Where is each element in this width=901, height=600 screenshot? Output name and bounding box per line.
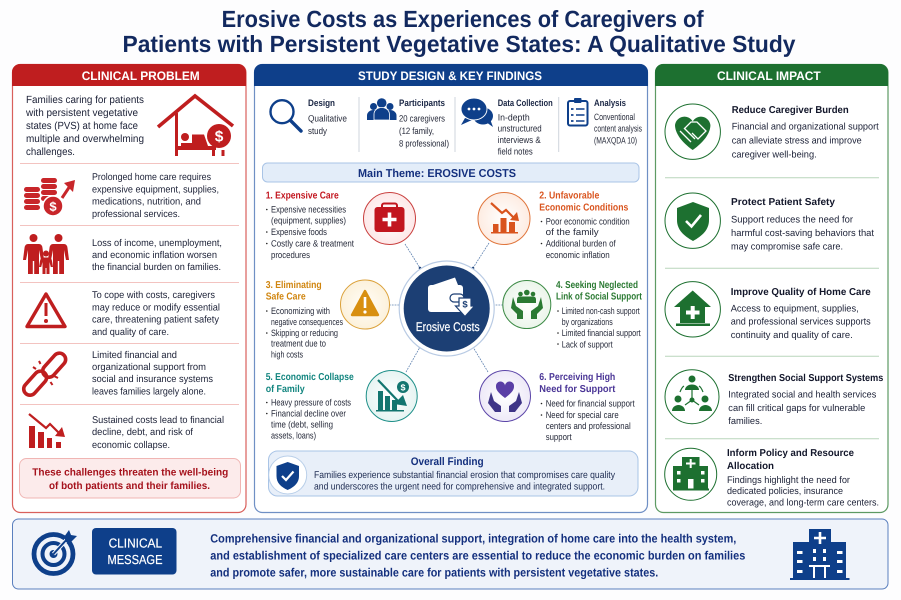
- theme 1: expensive care: Expensive foods: [271, 227, 327, 237]
- text: clinical message: and promote safer, more sustainable care for patients with persistent vegetative states.: [210, 566, 658, 580]
- text: strengthen social support systems: can fill critical gaps for vulnerable: [728, 403, 865, 414]
- text: protect patient safety: may compromise safe care.: [731, 242, 843, 252]
- text: limited support: [92, 350, 213, 398]
- theme 4: seeking neglected link of social support: Limited non-cash support: [562, 306, 640, 316]
- text: equipment costs: expensive equipment, supplies,: [92, 184, 219, 196]
- icon: clipboard checklist: [568, 98, 588, 126]
- icon: chart with dollar: $: [400, 382, 406, 392]
- theme 6: perceiving high need for support: Need for financial support: [546, 398, 635, 408]
- icon: hospital: [665, 448, 717, 500]
- text: protect patient safety: [731, 197, 874, 252]
- theme 4: seeking neglected link of social support: Lack of support: [562, 340, 613, 350]
- theme 3: eliminating safe care: treatment due to: [271, 338, 326, 348]
- icon: social network: [665, 370, 719, 424]
- text: income loss: the financial burden on families.: [92, 262, 221, 273]
- text: data collection: [498, 97, 553, 156]
- theme 1: expensive care: Costly care & treatment: [271, 238, 354, 248]
- text: safety threat: may reduce or modify essential: [92, 302, 220, 314]
- title: Patients with Persistent Vegetative States: A Qualitative Study: [122, 31, 796, 57]
- text: analysis: [594, 97, 642, 146]
- heading: study design: [254, 64, 648, 86]
- icon: warning triangle: [27, 294, 65, 326]
- text: financial decline: Sustained costs lead to financial: [92, 415, 224, 426]
- theme 3: eliminating safe care: [266, 280, 343, 360]
- center: erosive costs: Erosive Costs: [416, 320, 480, 334]
- theme 6: perceiving high need for support: Need for special care: [546, 410, 619, 420]
- text: intro: with persistent vegetative: [25, 108, 138, 119]
- text: financial decline: decline, debt, and risk of: [92, 427, 193, 438]
- theme 5: economic collapse of family: assets, loans): [271, 430, 316, 440]
- theme 3: eliminating safe care: Safe Care: [266, 292, 306, 302]
- theme 5: economic collapse of family: Heavy pressure of costs: [271, 398, 351, 408]
- callout: overall finding: and underscores the urgent need for comprehensive and integrated support.: [314, 482, 605, 492]
- text: reduce caregiver burden: caregiver well-being.: [732, 150, 817, 160]
- icon: participants: [367, 98, 397, 120]
- text: participants: Participants: [399, 97, 445, 108]
- text: analysis: (MAXQDA 10): [594, 136, 637, 146]
- text: design: Qualitative: [308, 114, 347, 124]
- text: participants: 8 professional): [399, 138, 449, 148]
- text: analysis: Analysis: [594, 97, 626, 108]
- text: clinical message: [210, 532, 746, 580]
- text: strengthen social support systems: [728, 373, 884, 427]
- heading: clinical problem: CLINICAL PROBLEM: [82, 69, 200, 83]
- icon: house with bed and dollar: $: [215, 128, 224, 146]
- text: financial decline: [92, 415, 224, 451]
- connectors: [389, 243, 503, 372]
- theme 4: seeking neglected link of social support: 4. Seeking Neglected: [556, 280, 638, 291]
- icon: house with bed and dollar: [158, 96, 233, 156]
- panel: clinical message: [12, 519, 888, 589]
- text: equipment costs: professional services.: [92, 209, 180, 220]
- title: Erosive Costs as Experiences of Caregivers of: [222, 6, 704, 32]
- text: strengthen social support systems: Strengthen Social Support Systems: [728, 373, 884, 384]
- theme 1: expensive care: 1. Expensive Care: [266, 190, 339, 202]
- title: [122, 6, 796, 57]
- theme 1: expensive care: procedures: [271, 250, 310, 260]
- theme 2: unfavorable economic conditions: 2. Unfavorable: [539, 190, 600, 202]
- theme 6: perceiving high need for support: [539, 372, 635, 442]
- icon: first aid kit: [364, 192, 416, 244]
- text: reduce caregiver burden: [732, 105, 879, 160]
- theme 6: perceiving high need for support: centers and professional: [546, 421, 631, 431]
- callout: challenges: [20, 458, 240, 498]
- theme 2: unfavorable economic conditions: Poor economic condition: [546, 216, 630, 226]
- theme 4: seeking neglected link of social support: Limited financial support: [562, 328, 641, 338]
- text: protect patient safety: Support reduces the need for: [731, 214, 854, 226]
- text: limited support: Limited financial and: [92, 350, 177, 361]
- icon: magnifier: [270, 100, 301, 131]
- text: intro: states (PVS) at home face: [26, 121, 138, 132]
- heading: clinical impact: [655, 64, 888, 86]
- theme 2: unfavorable economic conditions: of the family: [546, 227, 599, 237]
- text: participants: (12 family,: [399, 126, 434, 136]
- panel: study design and key findings: [254, 64, 648, 512]
- text: protect patient safety: Protect Patient Safety: [731, 197, 835, 208]
- theme 4: seeking neglected link of social support: Link of Social Support: [556, 292, 643, 302]
- theme 2: unfavorable economic conditions: economic inflation: [546, 250, 610, 260]
- text: clinical message: Comprehensive financial and organizational support, integration of home care into the health system,: [210, 532, 736, 546]
- text: strengthen social support systems: Integrated social and health services: [728, 390, 876, 400]
- text: clinical message: and establishment of specialized care centers are essential to reduce the economic burden on families: [210, 548, 746, 562]
- text: participants: [399, 97, 449, 148]
- theme 3: eliminating safe care: negative consequences: [271, 317, 343, 327]
- text: analysis: Conventional: [594, 112, 635, 122]
- callout: overall finding: [268, 451, 638, 496]
- text: data collection: In-depth: [498, 112, 530, 122]
- text: equipment costs: [92, 172, 219, 220]
- callout: challenges: of both patients and their families.: [49, 481, 210, 492]
- callout: overall finding: Families experience substantial financial erosion that compromises care quality: [314, 470, 615, 481]
- theme 6: perceiving high need for support: support: [546, 432, 572, 442]
- theme 5: economic collapse of family: time (debt, selling: [271, 420, 333, 430]
- text: design: study: [308, 126, 327, 136]
- panel: clinical impact: [655, 64, 888, 512]
- theme 1: expensive care: Expensive necessities: [271, 204, 346, 214]
- panel: clinical problem: [12, 64, 246, 512]
- icon: economic decline: [478, 192, 530, 244]
- icon: shield check: [276, 462, 299, 490]
- icon: shield: [665, 193, 720, 248]
- banner: main theme: Main Theme: EROSIVE COSTS: [358, 168, 516, 180]
- icon: coins with rising arrow: $: [49, 199, 57, 214]
- text: financial decline: economic collapse.: [92, 440, 170, 451]
- text: inform policy: coverage, and long-term care centers.: [727, 498, 879, 508]
- text: improve quality of home care: Improve Quality of Home Care: [731, 287, 871, 298]
- text: reduce caregiver burden: Reduce Caregiver Burden: [732, 105, 849, 116]
- text: strengthen social support systems: families.: [728, 416, 762, 427]
- text: reduce caregiver burden: can alleviate stress and improve: [732, 136, 862, 146]
- text: safety threat: To cope with costs, caregivers: [92, 290, 215, 301]
- icon: declining bars: [29, 414, 65, 448]
- text: design: [308, 97, 347, 136]
- theme 5: economic collapse of family: of Family: [266, 384, 305, 395]
- theme 4: seeking neglected link of social support: [556, 280, 643, 350]
- icon: hospital building: [790, 529, 850, 580]
- text: improve quality of home care: [731, 287, 871, 341]
- text: intro: Families caring for patients: [26, 95, 144, 106]
- theme 2: unfavorable economic conditions: Economic Conditions: [539, 202, 629, 214]
- icon: coins with rising arrow: [24, 178, 75, 216]
- text: limited support: leaves families largely alone.: [92, 386, 206, 398]
- text: improve quality of home care: Access to equipment, supplies,: [731, 304, 859, 314]
- text: safety threat: care, threatening patient safety: [92, 314, 219, 326]
- text: equipment costs: medications, nutrition, and: [92, 196, 201, 208]
- callout: challenges: These challenges threaten the well-being: [32, 468, 228, 478]
- text: improve quality of home care: and professional services supports: [731, 316, 871, 328]
- icon: chart with dollar: [366, 370, 417, 422]
- text: data collection: Data Collection: [498, 97, 553, 108]
- icon: warning: [340, 280, 390, 329]
- heading: clinical impact: CLINICAL IMPACT: [717, 69, 821, 83]
- badge: clinical message: CLINICAL: [109, 536, 162, 550]
- text: intro: multiple and overwhelming: [26, 134, 144, 145]
- text: data collection: unstructured: [498, 124, 542, 134]
- theme 1: expensive care: [266, 190, 354, 260]
- icon: hands with people: [503, 280, 551, 328]
- badge: clinical message: [92, 528, 176, 574]
- text: inform policy: Allocation: [727, 461, 774, 472]
- text: income loss: [92, 238, 222, 273]
- text: improve quality of home care: continuity and quality of care.: [731, 330, 853, 341]
- theme 2: unfavorable economic conditions: Additional burden of: [546, 238, 616, 248]
- text: inform policy: dedicated policies, insurance: [727, 486, 843, 497]
- theme 3: eliminating safe care: Economizing with: [271, 306, 330, 316]
- center: erosive costs: [399, 261, 494, 356]
- text: inform policy: Inform Policy and Resource: [727, 448, 854, 459]
- icon: hands with heart: [480, 370, 530, 422]
- callout: overall finding: Overall Finding: [411, 456, 484, 468]
- text: data collection: interviews &: [498, 135, 541, 145]
- text: intro: [25, 95, 144, 158]
- theme 5: economic collapse of family: Financial decline over: [271, 408, 346, 418]
- text: limited support: organizational support from: [92, 362, 206, 373]
- theme 3: eliminating safe care: high costs: [271, 350, 303, 360]
- text: design: Design: [308, 97, 335, 108]
- theme 3: eliminating safe care: Skipping or reducing: [271, 328, 338, 338]
- theme 4: seeking neglected link of social support: by organizations: [562, 317, 613, 327]
- icon: home with cross: [665, 282, 720, 337]
- theme 5: economic collapse of family: 5. Economic Collapse: [266, 372, 354, 383]
- text: inform policy: [727, 448, 879, 508]
- text: protect patient safety: harmful cost-saving behaviors that: [731, 228, 874, 239]
- icon: target with arrow: [34, 530, 77, 574]
- text: income loss: and economic inflation worsen: [92, 250, 217, 261]
- icon: broken chain: [21, 351, 68, 398]
- theme 1: expensive care: (equipment, supplies): [271, 216, 346, 226]
- banner: main theme: [262, 163, 639, 182]
- icon: chat bubbles: [461, 98, 493, 127]
- text: safety threat: [92, 290, 220, 338]
- text: inform policy: Findings highlight the need for: [727, 475, 851, 486]
- text: intro: challenges.: [26, 147, 75, 158]
- icon: family: [23, 234, 69, 274]
- theme 6: perceiving high need for support: Need for Support: [539, 384, 616, 395]
- theme 6: perceiving high need for support: 6. Perceiving High: [539, 372, 615, 383]
- text: data collection: field notes: [498, 146, 533, 156]
- heading: study design: STUDY DESIGN & KEY FINDINGS: [358, 69, 542, 83]
- theme 3: eliminating safe care: 3. Eliminating: [266, 280, 322, 291]
- text: limited support: social and insurance systems: [92, 374, 213, 385]
- theme 2: unfavorable economic conditions: [539, 190, 630, 260]
- text: participants: 20 caregivers: [399, 114, 445, 124]
- text: safety threat: and quality of care.: [92, 327, 169, 338]
- badge: clinical message: MESSAGE: [108, 552, 163, 567]
- theme 5: economic collapse of family: [266, 372, 354, 440]
- icon: handshake heart: [665, 104, 720, 159]
- icon: wallet: $: [462, 300, 468, 310]
- heading: clinical problem: [12, 64, 246, 86]
- text: equipment costs: Prolonged home care requires: [92, 172, 211, 183]
- text: analysis: content analysis: [594, 124, 642, 134]
- text: income loss: Loss of income, unemployment,: [92, 238, 222, 249]
- text: reduce caregiver burden: Financial and organizational support: [732, 122, 879, 132]
